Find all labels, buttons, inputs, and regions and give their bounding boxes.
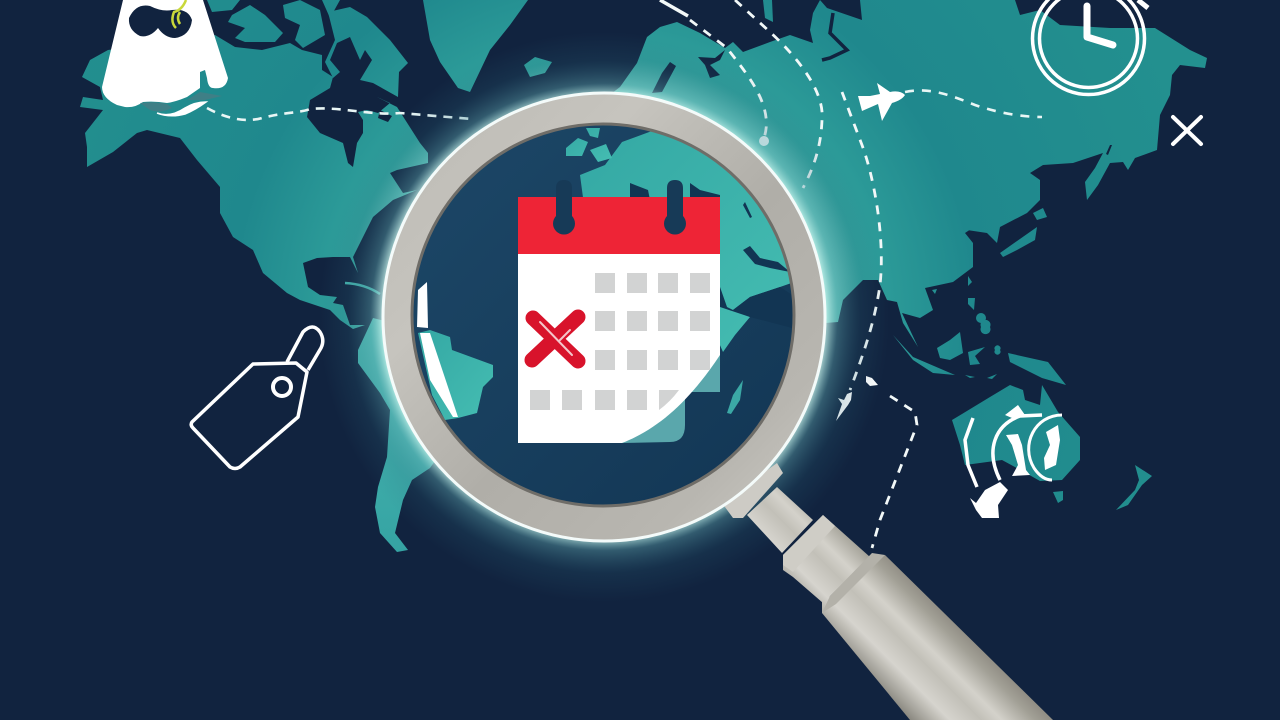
magnifier handle bbox=[722, 463, 1053, 720]
greenland bbox=[423, 0, 528, 92]
tasmania bbox=[1053, 491, 1063, 503]
lens: gulf of aden bbox=[720, 287, 780, 317]
eurasia bbox=[590, 0, 1207, 347]
lens: europe islands bbox=[566, 128, 612, 162]
small islands bbox=[932, 276, 1001, 379]
calendar bbox=[518, 180, 720, 443]
handle grip cap bbox=[822, 553, 885, 613]
calendar header bbox=[518, 197, 720, 254]
icon: price tag bbox=[191, 327, 323, 468]
south america bbox=[358, 318, 450, 552]
calendar date grid bbox=[530, 273, 710, 410]
lens interior bbox=[414, 126, 792, 504]
route: siberia bbox=[905, 90, 1042, 117]
borneo bbox=[937, 332, 963, 360]
icon: small plane south bbox=[836, 392, 852, 421]
icon: plane nose bbox=[866, 376, 878, 386]
lens: mediterranean and gulf gaps bbox=[630, 183, 790, 272]
red x mark bbox=[532, 317, 578, 361]
okhotsk slit bbox=[1106, 145, 1112, 155]
australia bbox=[952, 385, 1080, 481]
arctic islands bbox=[207, 0, 340, 48]
new guinea bbox=[1008, 353, 1066, 385]
lens: brazil bbox=[418, 330, 493, 420]
great lakes bbox=[378, 110, 392, 122]
route: dot bbox=[759, 136, 769, 146]
magnifier ring bbox=[383, 93, 825, 541]
world map bbox=[80, 0, 1207, 552]
sumatra bbox=[893, 335, 955, 375]
handle collar bbox=[722, 463, 783, 518]
baffin island bbox=[325, 7, 408, 97]
white sea bbox=[698, 50, 725, 78]
new zealand bbox=[1116, 465, 1152, 510]
icon: clock bbox=[1032, 0, 1148, 94]
icon: scribbles over australia bbox=[965, 405, 1062, 518]
sulawesi bbox=[968, 347, 985, 365]
lens: africa and arabia bbox=[580, 128, 800, 352]
calendar binding rings bbox=[553, 180, 686, 235]
iceland bbox=[524, 57, 552, 77]
lens rim bbox=[412, 124, 794, 506]
handle band bbox=[783, 515, 835, 572]
lens: white refraction bbox=[417, 282, 458, 417]
calendar page bbox=[518, 254, 720, 443]
icon: close x bbox=[1173, 117, 1201, 144]
japan bbox=[1000, 208, 1047, 257]
cuba bbox=[345, 283, 380, 294]
lens glow bbox=[319, 32, 889, 602]
icon: ghost bbox=[102, 0, 228, 116]
icon: airplane bbox=[858, 83, 905, 121]
northern channel bbox=[822, 13, 847, 60]
handle grip bbox=[822, 555, 1053, 720]
route: across north america bbox=[207, 108, 472, 120]
handle mid section bbox=[783, 515, 870, 603]
calendar back page bbox=[622, 352, 720, 443]
baltic bbox=[652, 62, 676, 93]
lens: madagascar bbox=[727, 380, 743, 414]
handle neck bbox=[747, 487, 813, 553]
route: top left stroke bbox=[660, 0, 688, 16]
routes: europe arcs bbox=[690, 0, 917, 548]
north america bbox=[80, 35, 428, 329]
map water gaps bbox=[378, 50, 1112, 155]
lens water bbox=[414, 126, 792, 504]
baltic-side island bbox=[763, 0, 773, 22]
